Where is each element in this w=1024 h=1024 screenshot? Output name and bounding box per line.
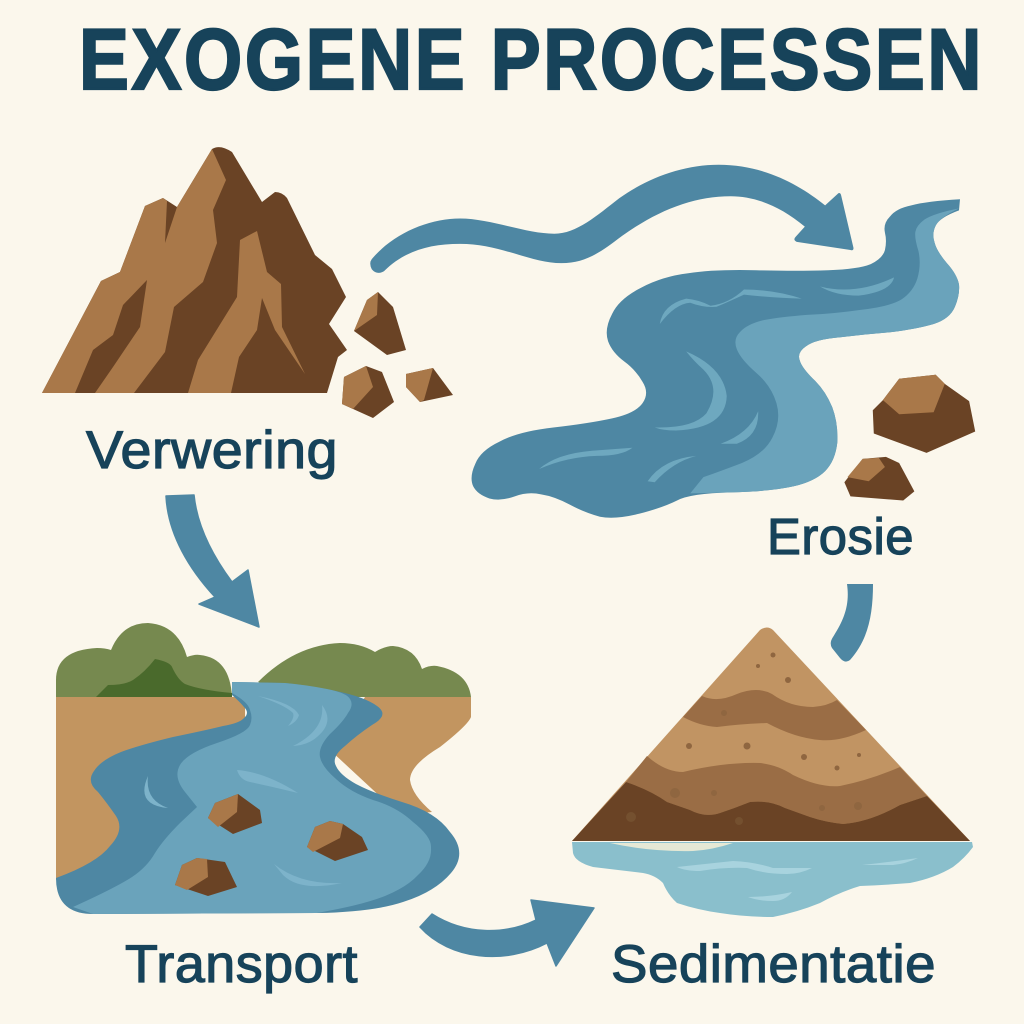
icon: transported rocks bbox=[175, 794, 368, 896]
arrow: transport to sedimentatie bbox=[420, 900, 594, 966]
label: Erosie: Erosie bbox=[767, 508, 914, 565]
icon: transport landscape bbox=[56, 623, 471, 914]
icon: water basin bbox=[572, 842, 973, 917]
arrow: verwering to transport bbox=[166, 495, 259, 627]
icon: sediment pile bbox=[572, 628, 970, 841]
label: Transport: Transport bbox=[125, 935, 358, 994]
label: Verwering: Verwering bbox=[86, 421, 338, 480]
icon: mountain bbox=[42, 147, 347, 393]
icon: river erosion bbox=[472, 199, 960, 518]
arrow: mountain to river bbox=[370, 165, 854, 273]
label: Sedimentatie: Sedimentatie bbox=[611, 935, 936, 994]
icon: erosion rocks bbox=[844, 375, 975, 500]
arrow: erosie to sedimentatie bbox=[831, 584, 873, 662]
icon: falling rocks bbox=[342, 292, 453, 418]
